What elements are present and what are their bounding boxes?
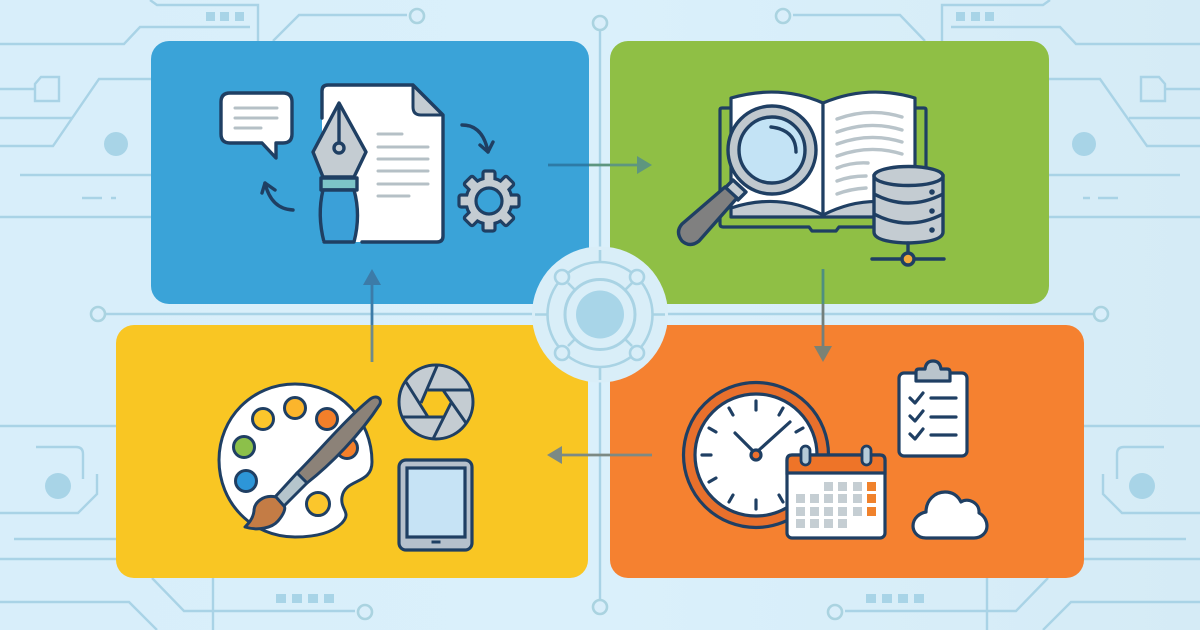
- arrow: research to schedule: [814, 269, 832, 362]
- icon: calendar: [787, 446, 885, 538]
- icon: cycle arrow left: [262, 183, 293, 210]
- icon: cycle arrow right: [462, 125, 493, 152]
- arrow: design to writing: [363, 269, 381, 362]
- panel: schedule (orange): [610, 325, 1084, 578]
- icon: wall clock: [684, 382, 828, 528]
- icon: fountain pen: [313, 103, 366, 242]
- central hub: [532, 246, 668, 382]
- arrow: writing to research: [548, 156, 652, 174]
- icon: document: [322, 85, 443, 242]
- icon: open book: [720, 92, 926, 231]
- icon: speech bubble: [221, 93, 292, 158]
- icon: database: [872, 166, 944, 265]
- panel: writing (blue): [151, 41, 589, 304]
- panel: design (yellow): [116, 325, 588, 578]
- icon: gear: [459, 171, 519, 231]
- panel: research (green): [610, 41, 1049, 304]
- icon: cloud: [913, 492, 987, 538]
- icon: paint palette: [219, 384, 372, 537]
- arrow: schedule to design: [547, 446, 652, 464]
- icon: tablet: [399, 460, 472, 550]
- icon: magnifying glass: [678, 106, 816, 244]
- icon: clipboard checklist: [899, 361, 967, 456]
- icon: paintbrush: [245, 397, 380, 529]
- icon: camera aperture: [399, 365, 473, 439]
